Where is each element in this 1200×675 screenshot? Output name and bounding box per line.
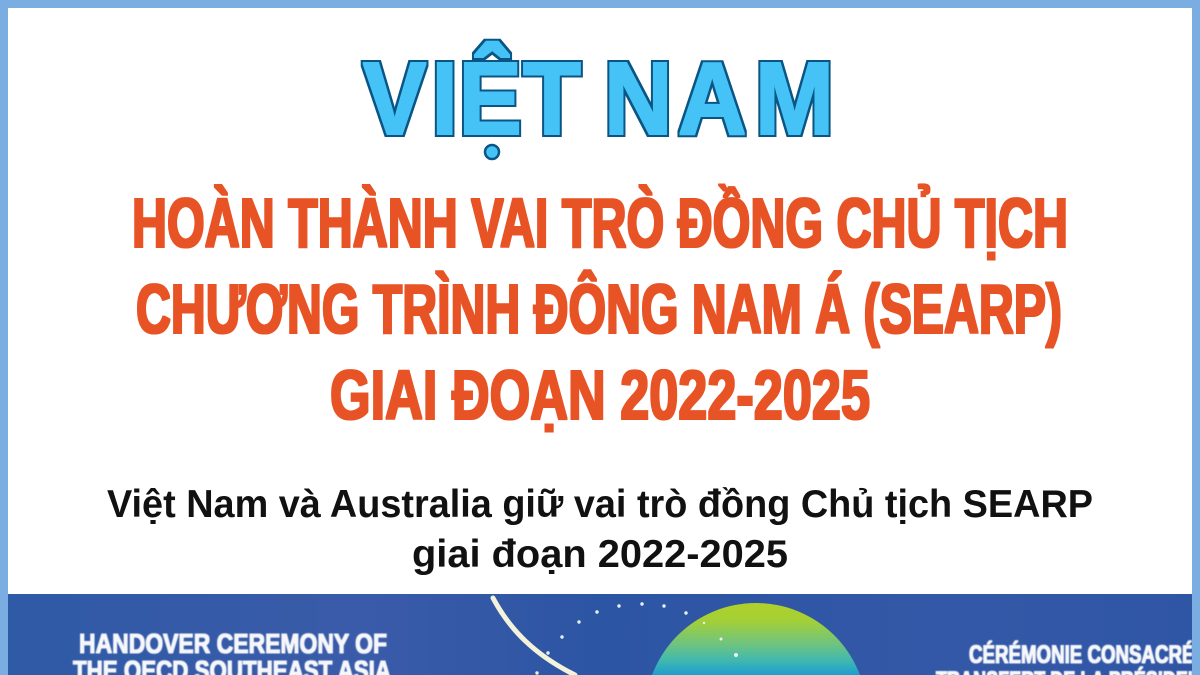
subtitle text — [107, 483, 1093, 576]
English backdrop text: HANDOVER CEREMONY OF — [79, 628, 387, 659]
photo background — [8, 594, 1192, 675]
photo panel: handover ceremony backdrop — [8, 594, 1200, 675]
heading: main orange title — [132, 183, 1068, 434]
white arc — [493, 598, 575, 675]
title: Việt Nam: VIỆT NAM — [363, 40, 834, 156]
heading: main orange title: GIAI ĐOẠN 2022-2025 — [330, 356, 870, 434]
subtitle text: Việt Nam và Australia giữ vai trò đồng Chủ tịch SEARP — [107, 483, 1093, 526]
subtitle text: giai đoạn 2022-2025 — [412, 533, 788, 576]
globe graphic — [645, 603, 867, 675]
dotted sparkle arc — [535, 602, 738, 675]
English backdrop text — [73, 628, 391, 675]
